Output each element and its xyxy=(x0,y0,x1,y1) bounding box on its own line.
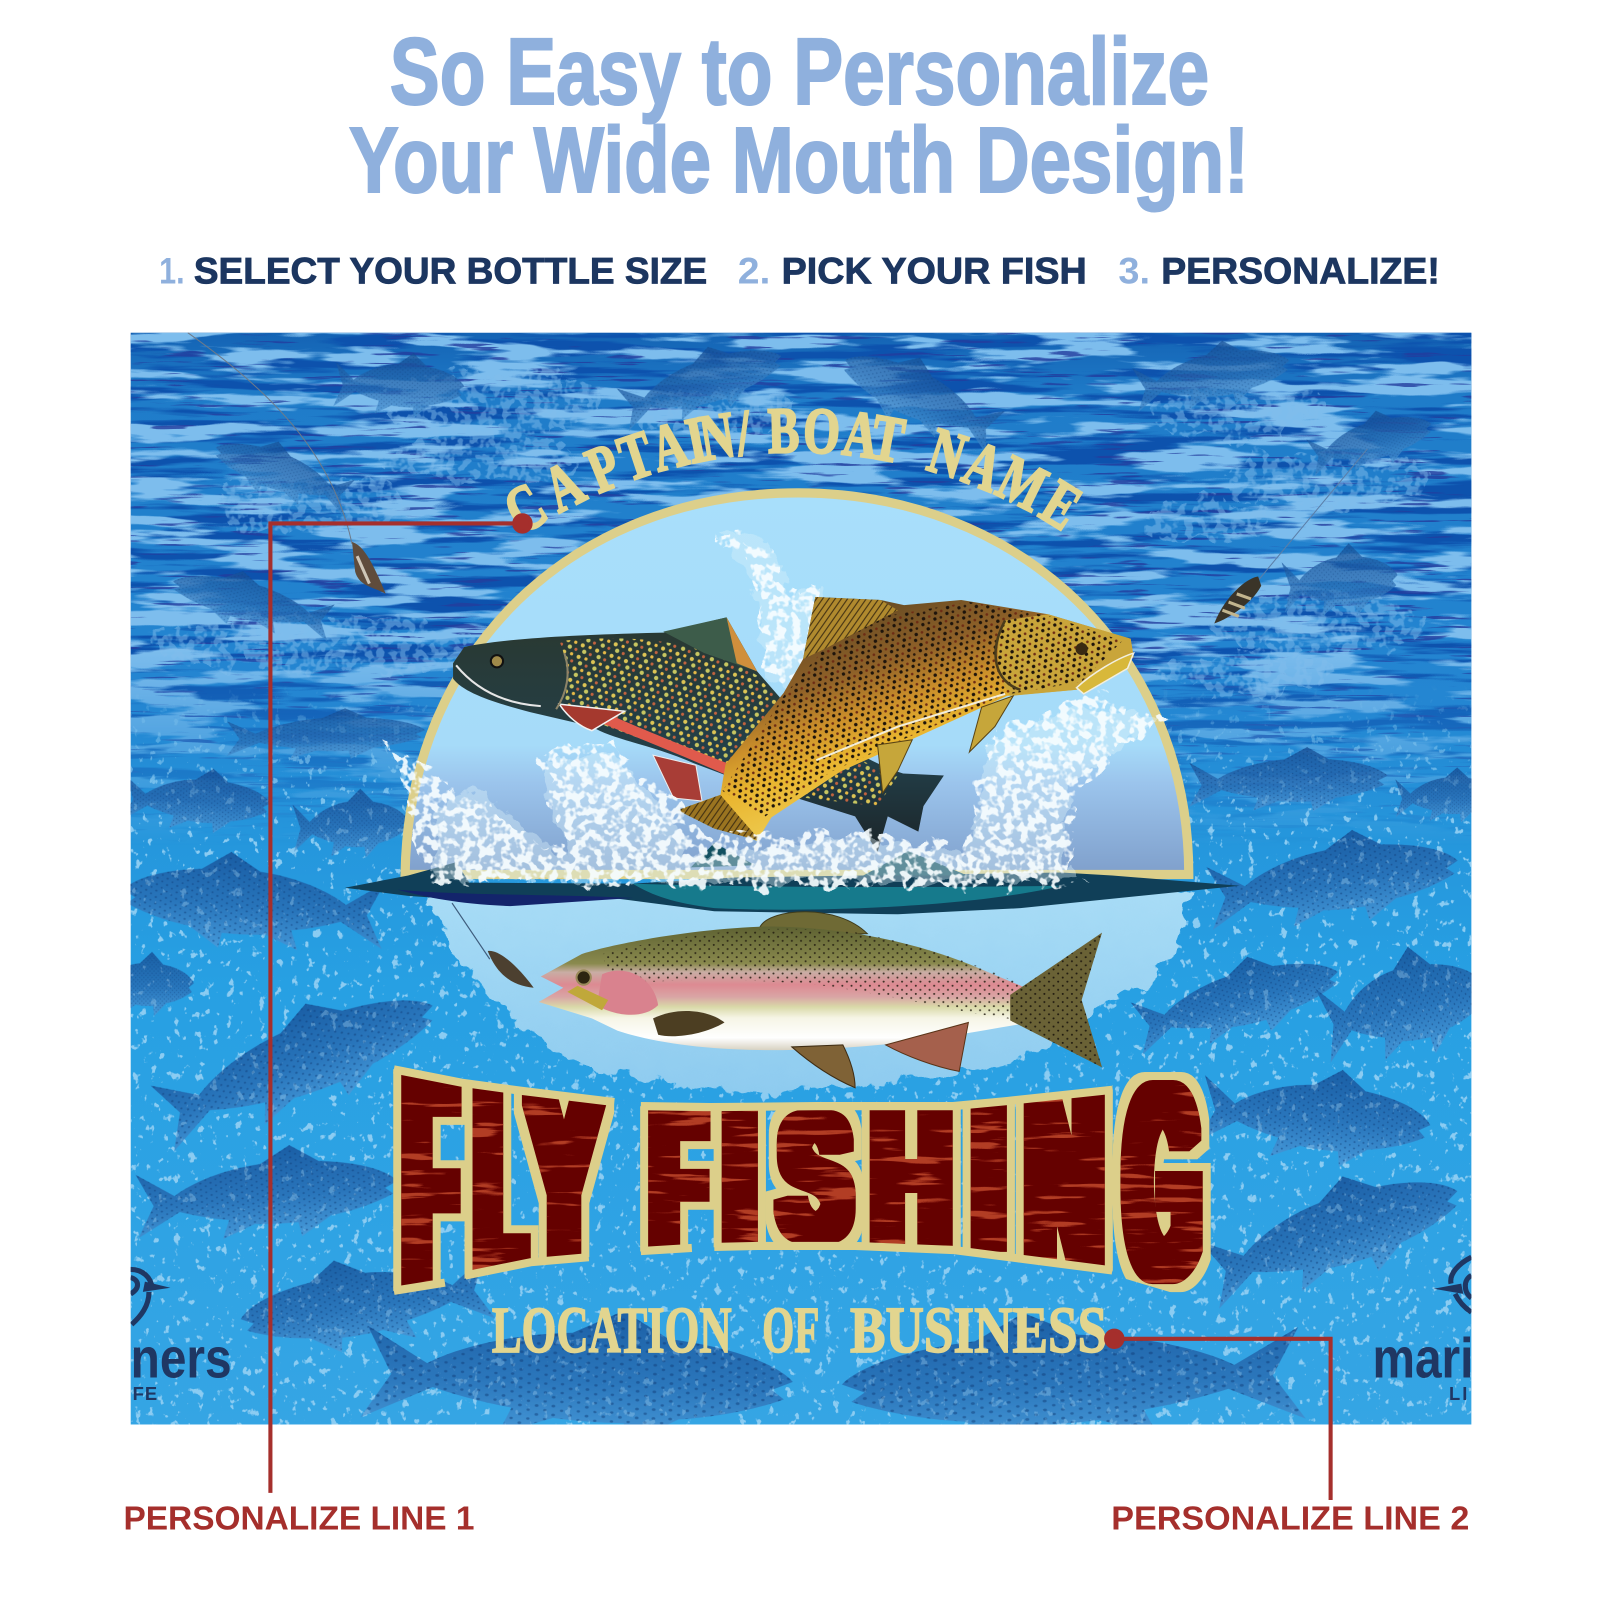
line 2 text: location of business: OF xyxy=(762,1295,819,1367)
fly fishing wordmark: S xyxy=(780,1080,850,1274)
fly fishing wordmark xyxy=(393,1065,1211,1295)
logo: right wrap fragment: mari xyxy=(1372,1327,1473,1390)
tall splash behind fish xyxy=(720,531,823,694)
captain / boat name lettering: A xyxy=(839,397,882,473)
captain / boat name lettering: A xyxy=(644,408,695,486)
left fly lure xyxy=(188,333,386,594)
line 2 text: location of business: LOCATION xyxy=(492,1295,732,1367)
logo: left wrap fragment: ners xyxy=(131,1327,232,1390)
captain / boat name lettering: N xyxy=(920,414,974,493)
captain / boat name lettering: A xyxy=(532,447,596,527)
title: Your Wide Mouth Design! xyxy=(349,108,1249,212)
lower water speckle over fish xyxy=(131,726,1472,1424)
light glow under waterline xyxy=(427,890,1189,1094)
panel: bottle wrap design: G xyxy=(1127,1030,1198,1334)
label: personalize line 1: PERSONALIZE LINE 1 xyxy=(123,1501,474,1538)
background fish school xyxy=(89,326,1501,1452)
steps row: PICK YOUR FISH xyxy=(782,251,1087,292)
fly fishing wordmark: F xyxy=(406,1014,454,1347)
captain / boat name lettering: B xyxy=(767,394,800,467)
steps row: PERSONALIZE! xyxy=(1161,251,1440,292)
fly fishing wordmark: L xyxy=(478,1040,523,1321)
callout: line 2 connector xyxy=(1106,1331,1331,1500)
logo: left wrap fragment xyxy=(131,1269,232,1404)
fly fishing wordmark: F xyxy=(653,1074,704,1283)
foam patches in upper water xyxy=(153,370,1429,696)
fly fishing wordmark: I xyxy=(724,1077,756,1276)
line 2 text: location of business: BUSINESS xyxy=(850,1295,1107,1367)
captain / boat name lettering: A xyxy=(954,427,1012,506)
callout: line 1 connector xyxy=(270,515,531,1493)
fly lure under water xyxy=(452,903,534,988)
captain / boat name lettering: I xyxy=(680,403,712,478)
fish: rainbow trout xyxy=(539,912,1102,1088)
line 2 text: location of business xyxy=(492,1307,1106,1354)
steps row: 2. xyxy=(738,251,770,292)
steps row: SELECT YOUR BOTTLE SIZE xyxy=(194,251,707,292)
captain / boat name lettering: E xyxy=(1029,466,1093,544)
captain / boat name lettering: M xyxy=(986,442,1058,526)
title xyxy=(349,19,1249,212)
steps row: 3. xyxy=(1118,251,1150,292)
captain / boat name lettering: O xyxy=(802,394,842,468)
right fly lure xyxy=(1214,449,1367,623)
arch emblem xyxy=(405,493,1189,874)
captain / boat name lettering: P xyxy=(577,430,631,507)
logo: right wrap fragment: LI xyxy=(1449,1383,1467,1404)
label: personalize line 2: PERSONALIZE LINE 2 xyxy=(1111,1501,1469,1538)
captain / boat name lettering: T xyxy=(610,417,662,496)
steps row: 1. xyxy=(159,251,185,292)
fly fishing wordmark: Y xyxy=(530,1052,598,1300)
panel: bottle wrap design xyxy=(89,326,1501,1452)
fly fishing wordmark: H xyxy=(872,1076,950,1280)
fish: brown trout xyxy=(678,597,1134,841)
logo: left wrap fragment: FE xyxy=(133,1383,157,1404)
steps row xyxy=(159,251,1440,292)
splashes and foam xyxy=(393,694,1162,886)
title: So Easy to Personalize xyxy=(390,19,1209,125)
captain / boat name lettering xyxy=(506,408,1084,532)
water background xyxy=(131,333,1471,1424)
fly fishing wordmark: N xyxy=(1027,1048,1102,1311)
captain / boat name lettering: C xyxy=(492,469,559,548)
fly fishing wordmark: I xyxy=(973,1068,1004,1288)
logo: right wrap fragment xyxy=(1372,1257,1473,1404)
captain / boat name lettering: T xyxy=(866,401,910,478)
captain / boat name lettering: N xyxy=(695,399,740,475)
waterline xyxy=(345,843,1240,914)
fish: brook trout xyxy=(453,617,944,852)
captain / boat name lettering: / xyxy=(733,397,755,470)
